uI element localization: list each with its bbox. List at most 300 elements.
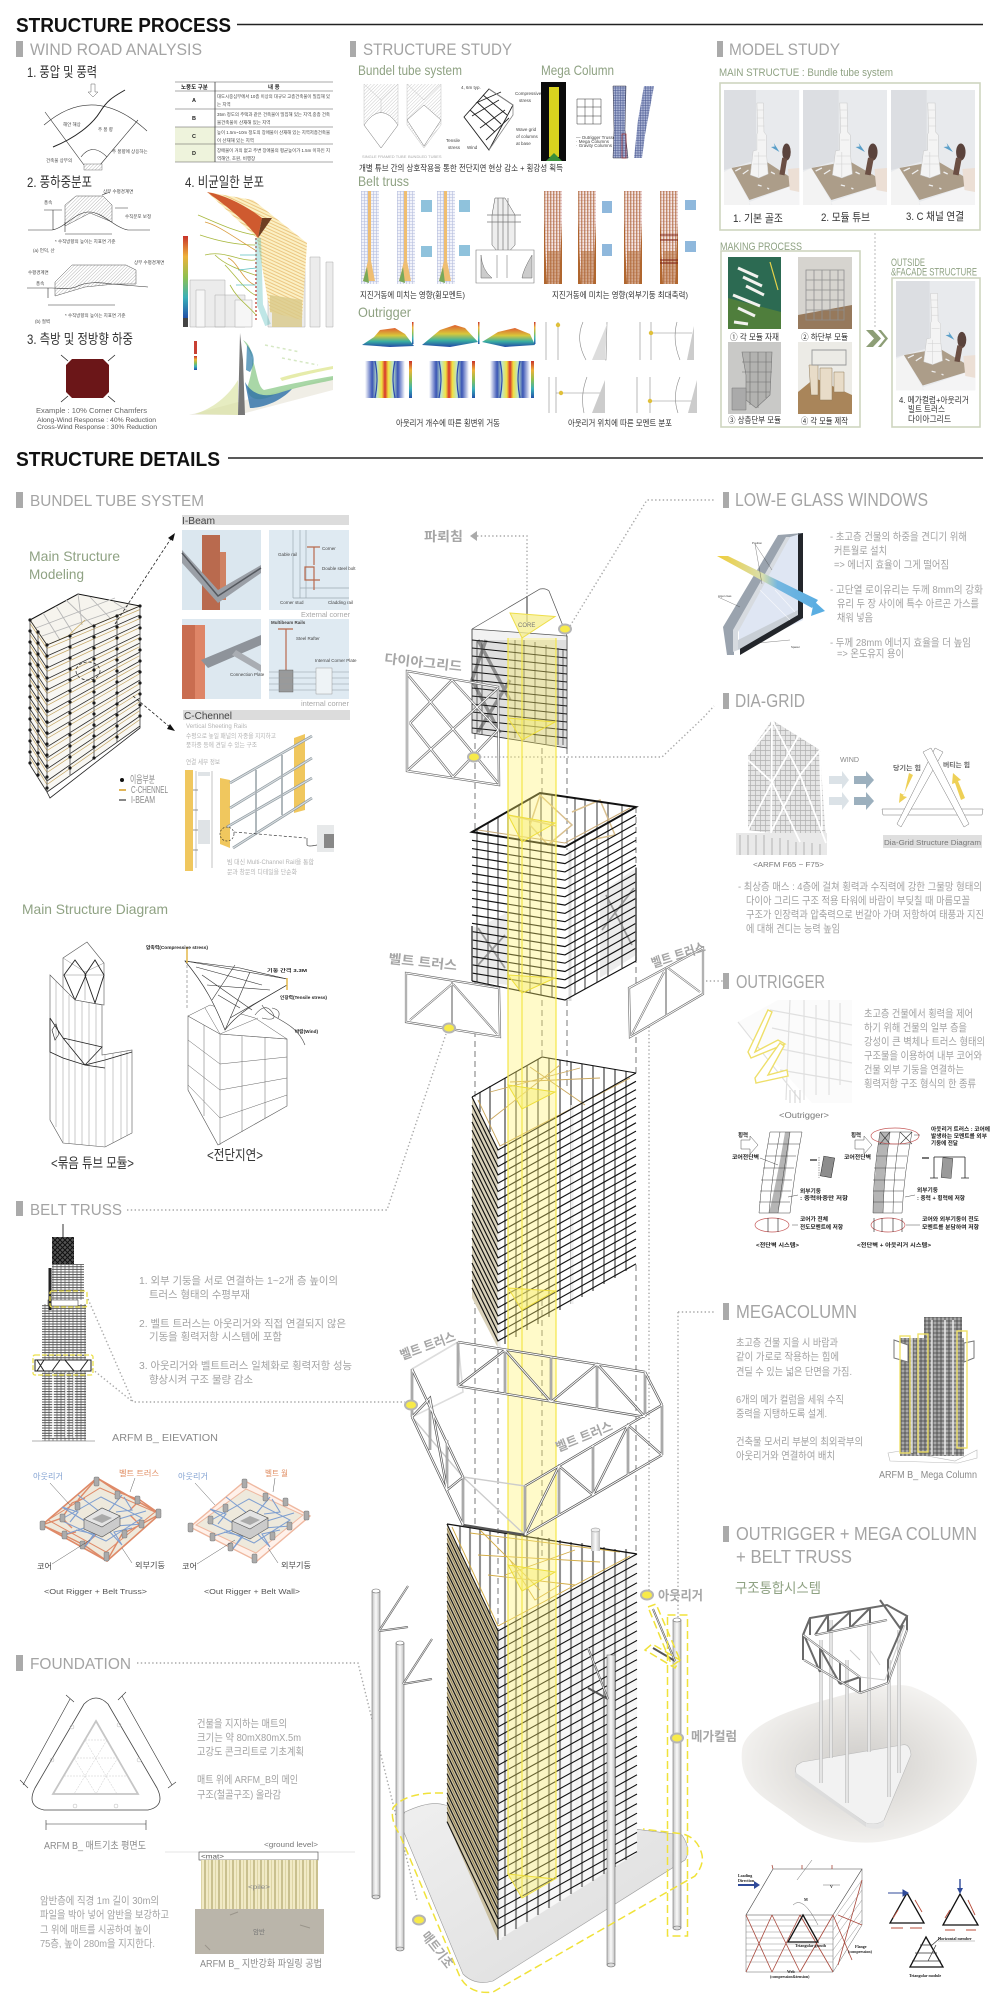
drawing: low-e window section bbox=[717, 533, 825, 655]
diagram: outrigger and belt truss plan bbox=[40, 1477, 161, 1561]
text: megacolumn description: 건축물 모서리 부분의 최외곽부의 bbox=[736, 1436, 863, 1448]
text: piling description: 암반층에 직경 1m 길이 30m의 bbox=[40, 1894, 159, 1907]
text: belt truss description: 2. 벨트 트러스는 아웃리거와 직접 연결되지 않은 bbox=[139, 1318, 346, 1330]
diagram: piling section: 암반 bbox=[253, 1927, 265, 1936]
panel: megacolumn bbox=[723, 1302, 977, 1481]
table: roughness categories: D bbox=[192, 151, 196, 157]
label: lightning rod bbox=[424, 529, 477, 544]
heading: wind load distribution: 2. 풍하중분포 bbox=[27, 174, 92, 190]
label: mega column with marker: 메가컬럼 bbox=[691, 1729, 737, 1744]
drawing: bundled tube module bbox=[50, 942, 132, 1147]
heading: model study: MODEL STUDY bbox=[729, 41, 840, 59]
diagram: shear wall and outrigger system: 외부기둥 bbox=[917, 1186, 938, 1194]
diagram: wind load over slope bbox=[27, 259, 164, 325]
table: roughness categories: 내 용 bbox=[268, 83, 280, 91]
diagram: shear wall system: 외부기둥 bbox=[800, 1187, 821, 1195]
chart: bending moment towers bbox=[361, 191, 470, 284]
heading: outrigger mega column belt truss: OUTRIGGER + MEGA COLUMN bbox=[736, 1524, 977, 1544]
subheading: main structure modeling: Main Structure bbox=[29, 548, 120, 564]
caption: mat foundation plan: ARFM B_ 매트기초 평면도 bbox=[44, 1840, 146, 1852]
diagram: piling section: <mat> bbox=[201, 1854, 225, 1860]
drawing: low-e window section: Position bbox=[752, 541, 762, 545]
caption: outrigger + belt wall: <Out Rigger + Belt Wall> bbox=[204, 1589, 300, 1596]
diagram: diagrid grid of columns: stress bbox=[519, 98, 532, 103]
module: third tower block bbox=[472, 1057, 636, 1350]
diagram: single framed and bundled tubes: BUNDLED TUBES bbox=[408, 154, 442, 159]
diagram: shear wall and outrigger system: 기둥에 전달 bbox=[931, 1139, 958, 1147]
legend: structure model: 이음부분 bbox=[130, 774, 155, 786]
module: top diagrid tower bbox=[472, 589, 567, 748]
image: external corner drawing: Double steel bolt bbox=[322, 566, 356, 571]
photo: module materials bbox=[728, 257, 781, 329]
diagram: diagrid force triangle: 당기는 힘 bbox=[893, 763, 921, 772]
detail: C-channel bbox=[183, 710, 350, 876]
label: wind: WIND bbox=[840, 757, 859, 764]
image: internal corner drawing: Multibeam Rails bbox=[271, 620, 306, 625]
labels: plan callouts: 코어 bbox=[37, 1561, 52, 1571]
drawing: shear lag: 압축력(Compressive stress) bbox=[146, 944, 209, 951]
photo: basic frame bbox=[724, 90, 799, 205]
image: internal corner drawing bbox=[269, 619, 357, 699]
diagram: wind load over slope: 수평경계면 bbox=[28, 269, 49, 276]
text: piling description: 파일을 박아 넣어 암반을 보강하고 bbox=[40, 1908, 169, 1921]
caption: piling method: ARFM B_ 지반강화 파일링 공법 bbox=[200, 1958, 322, 1970]
frame: outside and facade photo bbox=[892, 278, 980, 427]
heading: outrigger mega column belt truss bbox=[723, 1524, 977, 1567]
diagram: outrigger and belt wall plan bbox=[188, 1479, 310, 1563]
captions: making process: ③ 상층단부 모듈 bbox=[728, 415, 781, 425]
heading: dia-grid: DIA-GRID bbox=[735, 691, 805, 711]
panel: low-e glass windows bbox=[717, 490, 983, 660]
text: diagrid description bbox=[738, 880, 984, 935]
table: roughness categories: 장애물이 거의 없고 주변 장애물의 평균높이가 1.5m 이하인 지 bbox=[217, 147, 330, 154]
text: belt truss description: 향상시켜 구조 물량 감소 bbox=[149, 1374, 253, 1386]
arrows: wind direction bbox=[829, 771, 874, 810]
text: low-e description: 유리 두 장 사이에 특수 아르곤 가스를 bbox=[837, 598, 979, 610]
text: mat foundation: 건물을 지지하는 매트의 bbox=[197, 1717, 287, 1730]
text: piling description: 그 위에 매트를 시공하여 높이 bbox=[40, 1923, 151, 1936]
diagram: diagrid grid of columns: 4, 6m typ. bbox=[461, 85, 481, 90]
diagram: shear wall system: <전단벽 시스템> bbox=[756, 1241, 799, 1249]
core label triangle: CORE bbox=[518, 623, 535, 629]
panel: outrigger bbox=[723, 972, 990, 1249]
label: left belt truss: 벨트 트러스 bbox=[388, 951, 458, 973]
diagram: corner chamfers: Along-Wind Response : 40% Reduction bbox=[37, 417, 157, 424]
mega column with outrigger: left bbox=[396, 1639, 432, 1951]
label: lightning rod: 파뢰침 bbox=[424, 529, 463, 544]
image: external corner drawing: Corner stud bbox=[280, 600, 304, 605]
image: internal corner render: Connection Plate bbox=[230, 672, 265, 677]
marker: belt truss ring bbox=[405, 1400, 417, 1410]
label: outrigger with marker bbox=[641, 1588, 703, 1603]
label: internal corner: internal corner bbox=[301, 699, 349, 708]
caption: final model bbox=[899, 395, 969, 424]
captions: photos: 3. C 채널 연결 bbox=[906, 210, 964, 223]
text: belt truss description: 트러스 형태의 수평부재 bbox=[149, 1289, 250, 1301]
legend: structure model: I-BEAM bbox=[131, 795, 155, 806]
text: outrigger description: 하기 위해 건물의 일부 층을 bbox=[864, 1021, 967, 1034]
frame: making process photos bbox=[721, 251, 860, 427]
connector lines: dotted leaders bbox=[88, 500, 723, 1900]
photo: each module bbox=[798, 342, 852, 414]
title: structure process: STRUCTURE PROCESS bbox=[16, 14, 231, 37]
diagram: wind pressure sector: 해안 해상 bbox=[63, 121, 81, 128]
drawing: shear lag bbox=[146, 944, 328, 1145]
diagram: diagrid grid of columns: stress bbox=[448, 145, 461, 150]
image: internal corner drawing: Steel Rafter bbox=[296, 636, 320, 641]
drawing: shear lag: 인장력(Tensile stress) bbox=[280, 994, 328, 1001]
diagram: diagrid grid of columns: Wind bbox=[467, 145, 478, 150]
table: roughness categories: 높이 1.5m~10m 정도의 장애물이 산재해 있는 지역저층건축물 bbox=[217, 129, 330, 136]
caption: diagrid structure diagram: Dia-Grid Structure Diagram bbox=[884, 838, 981, 847]
diagram: triangular grid loading bbox=[738, 1860, 873, 1979]
heading: wind pressure: 1. 풍압 및 풍력 bbox=[27, 64, 97, 80]
text: low-e description: 커튼월로 설치 bbox=[834, 545, 887, 557]
text: low-e description bbox=[830, 530, 983, 660]
panel: dia-grid bbox=[723, 691, 984, 935]
diagram: triangle force modules bbox=[888, 1879, 978, 1978]
diagram: mega column plan bbox=[576, 99, 618, 148]
caption: moment distribution: 아웃리거 위치에 따른 모멘트 분포 bbox=[568, 418, 672, 428]
diagram: single framed and bundled tubes bbox=[362, 84, 442, 159]
labels: plan callouts: 외부기둥 bbox=[135, 1560, 165, 1570]
drawing: rail elevation bbox=[185, 770, 212, 871]
label: mat foundation with marker: 매트기초 bbox=[419, 1929, 456, 1971]
heading: structure study: STRUCTURE STUDY bbox=[363, 41, 512, 59]
caption: bundled tube module: <묶음 튜브 모듈> bbox=[51, 1155, 134, 1171]
image: internal corner drawing: Internal Corner Plate bbox=[315, 658, 357, 663]
text: low-e description: - 두께 28mm 에너지 효율을 더 높임 bbox=[830, 636, 971, 649]
label: mega column with marker bbox=[671, 1729, 737, 1744]
diagram: shear wall and outrigger system: 발생하는 모멘트를 외부 bbox=[931, 1132, 987, 1140]
labels: plan callouts: 외부기둥 bbox=[281, 1560, 311, 1570]
heading: wind road analysis: WIND ROAD ANALYSIS bbox=[30, 41, 202, 59]
panel: belt truss bbox=[16, 1201, 352, 1596]
diagram: corner chamfers: Example : 10% Corner Chamfers bbox=[36, 406, 147, 415]
heading: outrigger: OUTRIGGER bbox=[736, 972, 825, 992]
diagram: mega column plan: — Outrigger Trusses bbox=[576, 135, 618, 140]
text: vertical sheeting rails: 수평으로 놓일 패널의 자중을 지지하고 bbox=[186, 731, 276, 740]
diagram: shear wall system: 코어전단벽 bbox=[732, 1153, 759, 1161]
captions: making process: ① 각 모듈 자재 bbox=[730, 332, 779, 342]
table: roughness categories: 대도시중심부에서 10층 이상의 대규모 고층건축물이 밀집해 있 bbox=[217, 93, 330, 100]
text: megacolumn description: 같이 가로로 작용하는 힘에 bbox=[736, 1350, 839, 1363]
column stub bbox=[591, 1528, 600, 1551]
diagram: diagrid force triangle bbox=[882, 748, 983, 827]
caption: final model: 다이아그리드 bbox=[908, 414, 951, 424]
diagram: shear wall and outrigger system: 횡력 bbox=[851, 1131, 861, 1139]
diagram: diagrid grid of columns: Compressive bbox=[515, 91, 542, 96]
diagram: single framed and bundled tubes: SINGLE FRAMED TUBE bbox=[362, 154, 407, 159]
chart: moment distribution by outrigger position bbox=[546, 322, 697, 413]
caption: diagrid floors: <ARFM F65 ~ F75> bbox=[753, 860, 825, 869]
diagram: diagrid grid of columns: of columns bbox=[516, 134, 539, 139]
text: mat foundation bbox=[197, 1717, 304, 1801]
caption: final model: 4. 메가컬럼+아웃리거 bbox=[899, 395, 969, 405]
panel: assembled belt truss ring bbox=[412, 1342, 662, 1535]
panel: structure study bbox=[350, 41, 697, 428]
diagram: shear wall and outrigger system: <전단벽 + 아웃리거 시스템> bbox=[857, 1241, 931, 1249]
panel: outrigger mega column belt truss bbox=[723, 1524, 978, 1979]
text: vertical sheeting rails: 연결 세부 정보 bbox=[186, 757, 220, 766]
drawing: structure grid model bbox=[30, 594, 140, 798]
labels: plan callouts: 벨트 월 bbox=[265, 1468, 288, 1478]
diagram: corner chamfers bbox=[36, 355, 158, 431]
table: roughness categories: C bbox=[192, 134, 196, 140]
diagram: wind load over hill: 수직분포 보정 bbox=[125, 213, 151, 220]
text: low-e description: - 초고층 건물의 하중을 견디기 위해 bbox=[830, 530, 967, 543]
diagram: mega column plan: · Mega Columns bbox=[576, 139, 610, 144]
diagram: wind load over slope: 풍속 bbox=[36, 280, 44, 287]
captions: photos: 2. 모듈 튜브 bbox=[821, 211, 870, 224]
text: vertical sheeting rails: 풍하중 등에 견딜 수 있는 구조 bbox=[186, 740, 257, 749]
diagram: shear wall and outrigger system: 코어전단벽 bbox=[844, 1153, 871, 1161]
drawing: shear lag: 바람(Wind) bbox=[295, 1028, 319, 1035]
text: outrigger description bbox=[864, 1007, 985, 1090]
diagram: shear wall and outrigger system bbox=[844, 1125, 990, 1249]
subheading: outside and facade structure: OUTSIDE bbox=[891, 257, 925, 269]
panel: diagrid module bbox=[407, 671, 499, 785]
subheading: belt truss: Belt truss bbox=[358, 173, 409, 189]
diagram: mega column tower bbox=[541, 82, 566, 161]
caption: outrigger + belt truss: <Out Rigger + Belt Truss> bbox=[44, 1589, 147, 1596]
table: roughness categories: A bbox=[192, 98, 196, 104]
photo: lower module bbox=[798, 257, 852, 329]
diagram: wind load over hill: (a) 언덕, 산 bbox=[33, 247, 55, 254]
module: bottom tower block with mat foundation bbox=[402, 1524, 688, 1982]
diagram: piling section: <ground level> bbox=[264, 1840, 319, 1849]
image: internal corner render bbox=[182, 619, 265, 699]
subheading: main structure: MAIN STRUCTUE : Bundle tube system bbox=[719, 67, 893, 79]
text: low-e description: => 에너지 효율이 그게 떨어짐 bbox=[834, 559, 949, 571]
diagram: shear wall system: 횡력 bbox=[738, 1131, 748, 1139]
label: lower belt truss: 벨트 트러스 bbox=[554, 1418, 615, 1455]
diagram: shear wall system: : 중력하중만 저항 bbox=[800, 1194, 848, 1202]
diagram: mega column plan: · Gravity Columns bbox=[576, 143, 613, 148]
table: roughness categories: 35m 정도의 주택과 같은 건축물이 밀집해 있는 지역,중층 건축 bbox=[217, 111, 330, 118]
text: low-e description: - 고단열 로이유리는 두께 8mm의 강화 bbox=[830, 584, 983, 596]
diagram: shear wall and outrigger system: 아웃리거 트러스 : 코어에 bbox=[931, 1125, 990, 1133]
diagram: piling section bbox=[165, 1840, 355, 1954]
heading: non-uniform distribution: 4. 비균일한 분포 bbox=[185, 174, 264, 190]
text: outrigger description: 건물 외부 기둥을 연결하는 bbox=[864, 1063, 964, 1076]
diagram: wind pressure sector: 주 풍향에 상응하는 bbox=[112, 148, 148, 155]
frame: main structure photos bbox=[720, 83, 980, 230]
diagram: triangular grid loading: V bbox=[830, 1884, 833, 1889]
text: belt truss description bbox=[139, 1274, 352, 1386]
captions: making process: ② 하단부 모듈 bbox=[801, 332, 848, 342]
drawing: tower elevation bbox=[32, 1224, 95, 1441]
label: diagrid: 다이아그리드 bbox=[384, 651, 463, 674]
diagram: wind load over hill: * 수직방향의 높이는 지표면 기준 bbox=[55, 238, 116, 245]
arrow: to C-channel detail bbox=[133, 696, 175, 731]
caption: diagrid structure diagram bbox=[883, 835, 982, 848]
diagram: wind pressure sector: 주 풍 향 bbox=[98, 126, 113, 133]
text: belt truss description: 3. 아웃리거와 벨트트러스 일체화로 횡력저항 성능 bbox=[139, 1359, 352, 1372]
drawing: integrated structure bbox=[742, 1600, 977, 1843]
text: megacolumn description: 중력을 지탱하도록 설계. bbox=[736, 1407, 827, 1420]
text: diagrid description: 에 대해 견디는 능력 높임 bbox=[746, 922, 840, 935]
caption: axial force: 지진거동에 미치는 영향(외부기둥 최대축력) bbox=[552, 290, 688, 300]
chart: drift heatmaps bbox=[365, 361, 534, 398]
table: roughness categories: 노풍도 구분 bbox=[181, 83, 208, 91]
diagram: diagrid force triangle: 버티는 힘 bbox=[943, 760, 970, 769]
diagram: diagrid grid of columns: at base bbox=[516, 141, 531, 146]
image: outrigger axonometric bbox=[738, 1000, 852, 1103]
text: megacolumn description bbox=[736, 1336, 863, 1462]
arrow: to I-beam detail bbox=[115, 533, 175, 624]
diagram: shear wall and outrigger system: 모멘트를 분담하여 저항 bbox=[922, 1223, 979, 1231]
table: roughness categories: B bbox=[192, 116, 196, 122]
table: roughness categories: 물건축물이 산재해 있는 지역 bbox=[217, 119, 270, 126]
labels: plan callouts: 벨트 트러스 bbox=[119, 1468, 159, 1478]
diagram: wind load over hill bbox=[28, 188, 151, 254]
panel: bundel tube system bbox=[16, 492, 357, 1171]
captions: photos: 1. 기본 골조 bbox=[733, 212, 783, 225]
captions: photos bbox=[733, 210, 964, 225]
mega column with outrigger: front bbox=[588, 1648, 615, 1967]
caption: bending moment: 지진거동에 미치는 영향(휨모멘트) bbox=[360, 290, 465, 300]
title: structure details: STRUCTURE DETAILS bbox=[16, 448, 220, 471]
label: upper belt truss: 벨트 트러스 bbox=[398, 1329, 458, 1363]
text: multi-channel rail bbox=[227, 857, 314, 876]
text: megacolumn description: 초고층 건물 지을 시 바람과 bbox=[736, 1336, 838, 1349]
caption: mega column: ARFM B_ Mega Column bbox=[879, 1470, 977, 1481]
diagram: wind pressure sector bbox=[44, 84, 148, 170]
text: multi-channel rail: 빔 대신 Multi-Channel Rail을 통합 bbox=[227, 857, 314, 866]
image: external corner drawing: Cladding rail bbox=[328, 600, 353, 605]
labels: plan callouts bbox=[33, 1468, 311, 1571]
photo: mega column and diagrid bbox=[896, 281, 975, 390]
heading: bundel tube system: BUNDEL TUBE SYSTEM bbox=[30, 493, 204, 510]
diagram: triangular grid loading: Flange bbox=[855, 1944, 867, 1949]
subheading: outside and facade structure bbox=[891, 257, 977, 278]
table: roughness categories bbox=[175, 82, 333, 162]
diagram: diagrid grid of columns: Wave grid bbox=[516, 127, 537, 132]
drawing: diagrid building bbox=[736, 720, 827, 855]
labels: plan callouts: 아웃리거 bbox=[178, 1471, 208, 1481]
subheading: bundel tube system: Bundel tube system bbox=[358, 62, 462, 78]
diagram: shear wall system bbox=[732, 1131, 848, 1249]
highlight: mat foundation dashed outline bbox=[392, 1793, 702, 1992]
text: piling description: 75층, 높이 280m을 지지한다. bbox=[40, 1938, 155, 1950]
diagram: triangular grid loading: Direction bbox=[738, 1878, 755, 1883]
diagram: shear wall and outrigger system: 코어와 외부기둥이 전도 bbox=[922, 1215, 979, 1223]
diagram: shear wall system: 전도모멘트에 저항 bbox=[800, 1223, 843, 1231]
core label triangle bbox=[510, 613, 555, 638]
table: roughness categories: 역해안, 초원, 비행장 bbox=[217, 155, 255, 162]
connector: dashed line bbox=[874, 233, 876, 328]
diagram: mega column deformation bbox=[613, 86, 654, 158]
text: mat foundation: 고강도 콘크리트로 기초계획 bbox=[197, 1746, 304, 1758]
subheading: main structure modeling bbox=[29, 548, 120, 582]
panel: model study bbox=[717, 41, 980, 427]
foundation slab bbox=[402, 1804, 688, 1982]
text: belt truss description: 기동을 횡력저항 시스템에 포함 bbox=[149, 1330, 282, 1343]
heading: foundation: FOUNDATION bbox=[30, 1656, 131, 1673]
text: mat foundation: 매트 위에 ARFM_B의 메인 bbox=[197, 1773, 298, 1786]
text: megacolumn description: 아웃리거와 연결하여 배치 bbox=[736, 1449, 835, 1462]
chart: CFD streamlines bbox=[183, 192, 333, 327]
heading: outrigger mega column belt truss: + BELT TRUSS bbox=[736, 1547, 852, 1567]
text: megacolumn description: 견딜 수 있는 넓은 단면을 가짐. bbox=[736, 1366, 852, 1378]
chart: column axial force towers bbox=[544, 191, 696, 284]
diagram: triangular grid loading: Loading bbox=[738, 1873, 752, 1878]
label: mat foundation with marker bbox=[413, 1916, 456, 1971]
text: outrigger description: 구조물을 이용하여 내부 코어와 bbox=[864, 1049, 982, 1062]
panel: foundation bbox=[16, 1655, 355, 1970]
text: outrigger description: 초고층 건물에서 횡력을 제어 bbox=[864, 1007, 973, 1020]
marker: diagrid bbox=[468, 752, 480, 762]
diagram: triangle force modules: Horizontal member bbox=[938, 1936, 972, 1941]
diagram: shear wall and outrigger system: : 중력 + 횡력에 저항 bbox=[917, 1194, 965, 1202]
diagram: shear wall system: 코어가 전체 bbox=[800, 1215, 828, 1223]
diagram: piling section: <pile> bbox=[248, 1884, 270, 1891]
text: outrigger description: 횡력저항 구조 형식의 한 종류 bbox=[864, 1077, 976, 1090]
subheading: integrated structure system: 구조통합시스템 bbox=[735, 1580, 821, 1596]
image: external corner drawing: Gable rail bbox=[278, 552, 297, 557]
drawing: shear lag: 기둥 간격 3.3M bbox=[267, 967, 307, 974]
text: outrigger description: 강성이 큰 벽체나 트러스 형태의 bbox=[864, 1036, 985, 1048]
subheading: making process: MAKING PROCESS bbox=[720, 241, 802, 253]
photo: upper module bbox=[728, 342, 781, 414]
legend: structure model bbox=[119, 774, 168, 806]
text: piling description bbox=[40, 1894, 169, 1950]
heading: belt truss: BELT TRUSS bbox=[30, 1202, 122, 1219]
photo: module tube bbox=[803, 90, 887, 205]
caption: shear lag: <전단지연> bbox=[207, 1147, 263, 1163]
heading: low-e glass windows: LOW-E GLASS WINDOWS bbox=[735, 490, 928, 510]
diagram: triangular grid loading: M bbox=[804, 1897, 808, 1902]
drawing: rail axonometric bbox=[220, 734, 334, 852]
image: external corner render bbox=[182, 530, 261, 610]
labels: plan callouts: 아웃리거 bbox=[33, 1471, 63, 1481]
diagram: wind load over slope: (b) 절벽 bbox=[35, 318, 50, 325]
diagram: diagrid grid of columns bbox=[446, 85, 542, 150]
diagram: triangular grid loading: Web bbox=[787, 1969, 796, 1974]
caption: final model: 빌트 트러스 bbox=[908, 404, 945, 414]
text: megacolumn description: 6개의 메가 컬럼을 세워 수직 bbox=[736, 1393, 844, 1406]
bar: C-channel: C-Chennel bbox=[184, 711, 232, 722]
labels: plan callouts: 코어 bbox=[182, 1561, 197, 1571]
diagram: diagrid grid of columns: Tensile bbox=[446, 138, 461, 143]
drawing: low-e window section: Argon Gas bbox=[718, 594, 732, 598]
text: low-e description: 채워 넣음 bbox=[837, 611, 873, 624]
table: roughness categories: 이 산재해 있는 지역 bbox=[217, 137, 254, 144]
bottom block faces bbox=[447, 1524, 637, 1940]
diagram: triangular grid loading: Triangular grouth bbox=[795, 1943, 827, 1948]
mega column with outrigger: right highlighted bbox=[645, 1604, 688, 1936]
caption: elevation: ARFM B_ EIEVATION bbox=[112, 1433, 218, 1444]
diagram: triangular grid loading: (compression&tension) bbox=[770, 1974, 810, 1979]
caption: tube interaction: 개별 튜브 간의 상호작용을 통한 전단지연 현상 감소 + 횡강성 획득 bbox=[359, 163, 563, 173]
chart: 3D drift surfaces bbox=[362, 322, 536, 347]
drawing: mega column tower bbox=[888, 1317, 977, 1463]
captions: making process: ④ 각 모듈 제작 bbox=[801, 416, 848, 426]
heading: megacolumn: MEGACOLUMN bbox=[736, 1302, 857, 1322]
text: vertical sheeting rails bbox=[186, 723, 276, 766]
diagram: corner chamfers: Cross-Wind Response : 30% Reduction bbox=[37, 424, 158, 431]
subheading: mega column: Mega Column bbox=[541, 62, 614, 78]
text: vertical sheeting rails: Vertical Sheeting Rails bbox=[186, 723, 248, 730]
subheading: main structure modeling: Modeling bbox=[29, 566, 84, 582]
text: low-e description: => 온도유지 용이 bbox=[837, 648, 904, 660]
subheading: main structure diagram: Main Structure Diagram bbox=[22, 901, 168, 917]
marker: roof bbox=[559, 624, 571, 634]
image: external corner drawing bbox=[269, 530, 356, 610]
bar: I-beam bbox=[182, 515, 349, 527]
diagram: wind pressure sector: 건축물 상부의 bbox=[46, 157, 72, 164]
